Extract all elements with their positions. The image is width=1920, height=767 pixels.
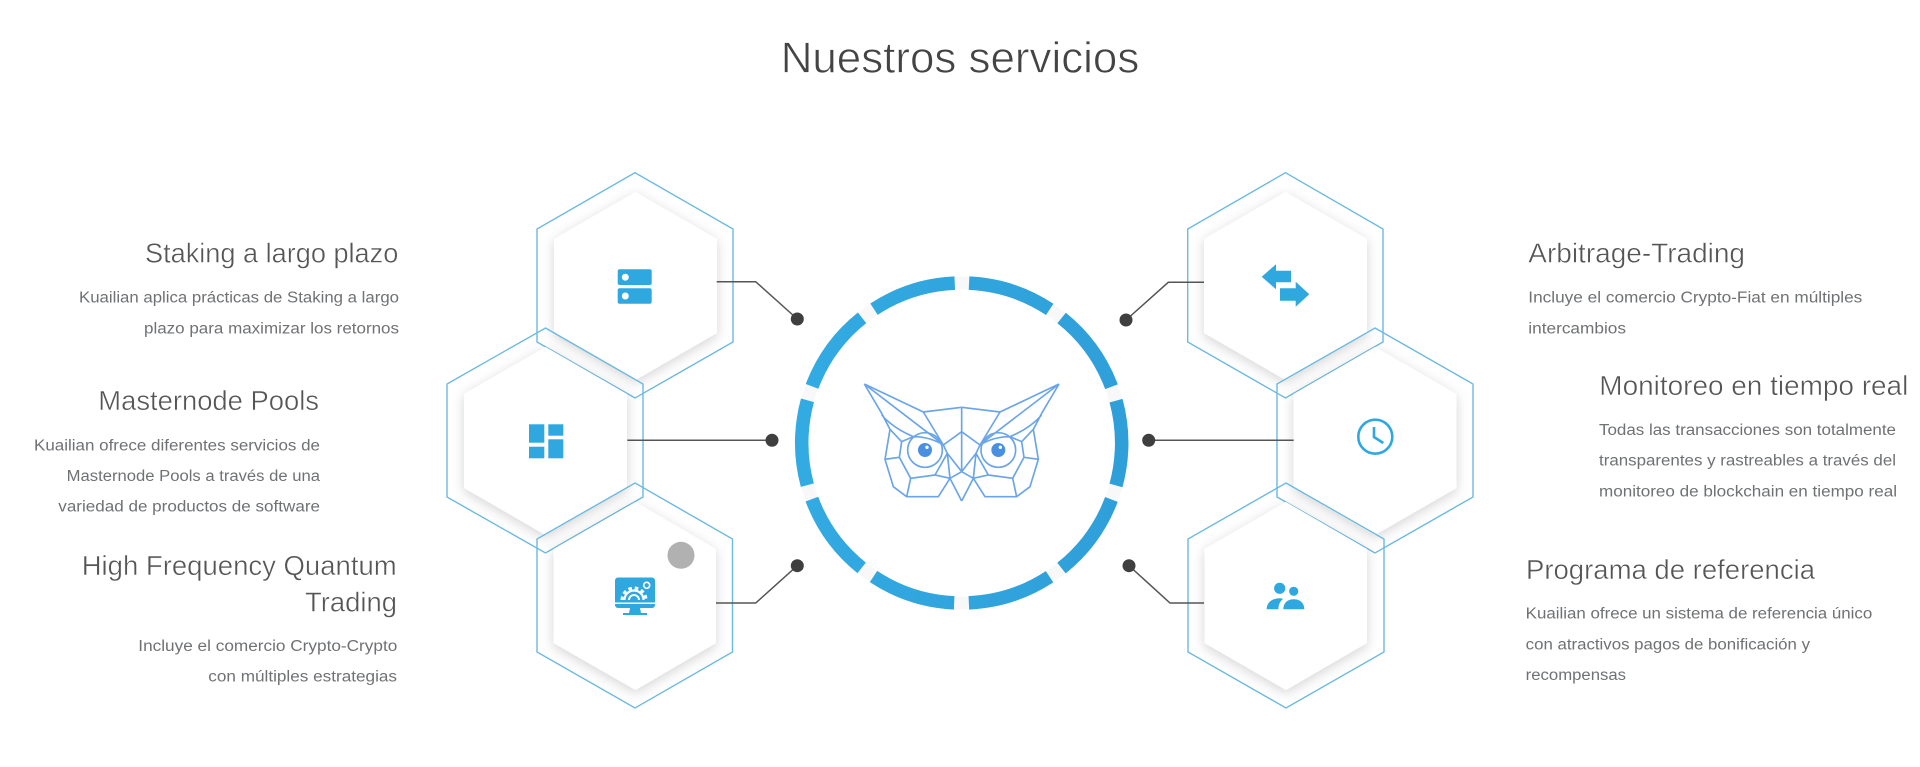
text block: High Frequency Quantum Trading: Trading <box>305 587 397 618</box>
text block: High Frequency Quantum Trading: Incluye el comercio Crypto-Crypto <box>138 638 397 655</box>
text block: Arbitrage-Trading: Arbitrage-Trading <box>1528 238 1745 269</box>
text block: Arbitrage-Trading: intercambios <box>1528 320 1626 337</box>
connector: High Frequency <box>716 559 804 603</box>
icon: server <box>618 269 652 304</box>
grey marker dot <box>668 542 694 569</box>
icon: monitor with gears <box>615 578 655 615</box>
text block: Masternode Pools: Kuailian ofrece diferentes servicios de <box>34 438 320 455</box>
text block: Staking a largo plazo: Kuailian aplica prácticas de Staking a largo <box>79 290 399 307</box>
panel: Arbitrage hexagon <box>1120 173 1383 398</box>
central segmented ring <box>795 276 1129 610</box>
text block: Staking a largo plazo: plazo para maximizar los retornos <box>144 320 399 337</box>
text block: Monitoreo en tiempo real: monitoreo de blockchain en tiempo real <box>1599 484 1897 501</box>
text block: Masternode Pools: variedad de productos de software <box>58 499 320 516</box>
connector: Staking <box>717 282 804 326</box>
text block: Masternode Pools: Masternode Pools a través de una <box>67 468 320 485</box>
icon: owl logo <box>864 384 1059 501</box>
connector: Masternode <box>627 434 778 447</box>
icon: people <box>1267 583 1304 609</box>
icon: dashboard grid <box>529 424 563 458</box>
text block: Staking a largo plazo: Staking a largo plazo <box>145 238 398 269</box>
text block: Programa de referencia: Programa de referencia <box>1526 554 1815 585</box>
connector: Arbitrage <box>1120 282 1204 326</box>
icon: clock <box>1358 420 1392 454</box>
owl left half <box>864 384 962 501</box>
title: Nuestros servicios <box>781 34 1139 83</box>
panel: Monitoreo hexagon <box>1142 328 1473 553</box>
connector: Monitoreo <box>1142 434 1294 447</box>
panel: Masternode hexagon <box>447 328 778 553</box>
text block: Staking a largo plazo <box>79 238 399 337</box>
owl right half <box>962 384 1059 501</box>
text block: Monitoreo en tiempo real: Todas las transacciones son totalmente <box>1599 422 1896 439</box>
text block: Programa de referencia: con atractivos pagos de bonificación y <box>1526 636 1810 653</box>
panel: Programa hexagon <box>1122 483 1384 708</box>
connector: Programa <box>1122 559 1204 603</box>
text block: Arbitrage-Trading <box>1528 238 1863 337</box>
icon: exchange arrows <box>1262 264 1309 307</box>
text block: High Frequency Quantum Trading: High Frequency Quantum <box>82 550 397 581</box>
text block: Arbitrage-Trading: Incluye el comercio Crypto-Fiat en múltiples <box>1528 290 1863 307</box>
text block: Programa de referencia: Kuailian ofrece un sistema de referencia único <box>1526 605 1872 622</box>
text block: Monitoreo en tiempo real: transparentes y rastreables a través del <box>1599 453 1896 470</box>
text block: Programa de referencia: recompensas <box>1526 667 1626 684</box>
text block: Masternode Pools <box>34 385 320 516</box>
text block: High Frequency Quantum Trading <box>82 550 397 686</box>
text block: High Frequency Quantum Trading: con múltiples estrategias <box>208 669 397 686</box>
text block: Monitoreo en tiempo real: Monitoreo en tiempo real <box>1599 370 1908 401</box>
panel: Staking hexagon <box>537 173 804 398</box>
panel: High Frequency hexagon <box>537 483 804 708</box>
text block: Monitoreo en tiempo real <box>1599 370 1908 501</box>
text block: Programa de referencia <box>1526 554 1872 684</box>
text block: Masternode Pools: Masternode Pools <box>98 385 319 416</box>
